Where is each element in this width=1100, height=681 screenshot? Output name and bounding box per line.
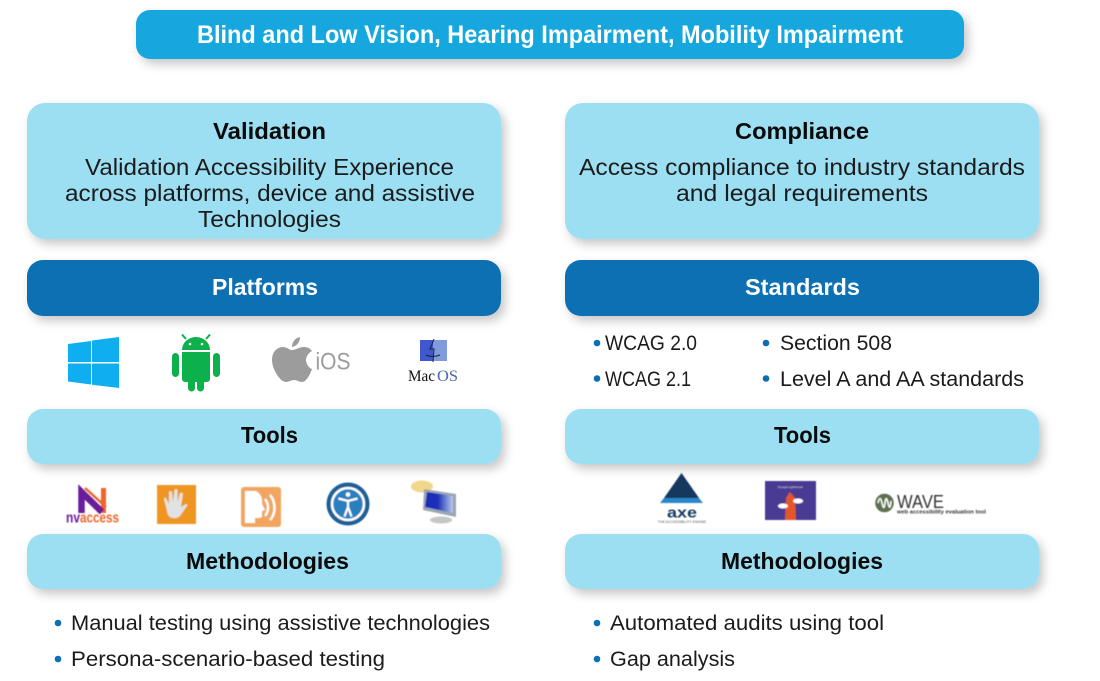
heading: tools left <box>27 409 501 464</box>
list: automated methodologies: Gap analysis <box>610 648 735 671</box>
icon: android <box>172 334 220 392</box>
heading: platforms <box>27 260 501 316</box>
icon: windows <box>68 337 119 388</box>
heading: methodologies left <box>27 534 501 589</box>
panel: compliance <box>565 103 1039 239</box>
icon: nvaccess: access <box>80 510 119 526</box>
icon: axe <box>658 473 707 524</box>
title banner <box>136 10 964 59</box>
list: standards <box>594 332 1024 391</box>
icon: WAVE <box>875 492 986 516</box>
heading: standards <box>565 260 1039 316</box>
panel: validation <box>27 103 501 239</box>
panel: validation: Validation Accessibility Experience <box>85 154 454 180</box>
heading: tools right: Tools <box>774 422 831 448</box>
icon: lighthouse: Google Lighthouse <box>778 485 803 489</box>
panel: compliance: and legal requirements <box>676 180 928 206</box>
heading: tools left: Tools <box>241 422 298 448</box>
title banner: Blind and Low Vision, Hearing Impairment, Mobility Impairment <box>197 21 904 49</box>
heading: methodologies right: Methodologies <box>721 548 883 574</box>
heading: methodologies right <box>565 534 1039 589</box>
icon: lighthouse <box>765 481 816 520</box>
heading: tools right <box>565 409 1039 464</box>
list: automated methodologies <box>594 612 884 671</box>
list: automated methodologies: Automated audits using tool <box>610 612 884 635</box>
list: manual methodologies <box>55 612 490 671</box>
icon: apple iOS: iOS <box>316 348 350 376</box>
list: standards: WCAG 2.1 <box>605 368 691 391</box>
icon: hand <box>157 485 196 524</box>
icon: apple iOS <box>272 337 350 382</box>
icon: computer monitor <box>411 480 456 524</box>
icon: Mac OS: Mac <box>408 368 435 385</box>
heading: methodologies left: Methodologies <box>186 548 349 574</box>
icon: axe: axe <box>667 504 697 522</box>
heading: platforms: Platforms <box>212 274 318 300</box>
icon: Mac OS <box>408 339 458 385</box>
icon: speaking head <box>241 487 281 527</box>
list: standards: Section 508 <box>780 332 892 355</box>
list: standards: Level A and AA standards <box>780 368 1024 391</box>
icon: WAVE: web accessibility evaluation tool <box>896 510 986 516</box>
panel: compliance: Compliance <box>735 118 869 144</box>
panel: validation: across platforms, device and assistive <box>65 180 475 206</box>
icon: accessibility <box>326 482 370 526</box>
icon: nvaccess <box>66 488 119 526</box>
panel: compliance: Access compliance to industry standards <box>579 154 1025 180</box>
heading: standards: Standards <box>745 274 860 300</box>
icon: axe: THE ACCESSIBILITY ENGINE <box>658 520 707 524</box>
list: standards: WCAG 2.0 <box>605 332 697 355</box>
icon: nvaccess: nv <box>66 510 80 526</box>
panel: validation: Technologies <box>198 206 341 232</box>
panel: validation: Validation <box>213 118 326 144</box>
icon: WAVE: WAVE <box>897 492 944 512</box>
icon: Mac OS: OS <box>437 368 458 385</box>
list: manual methodologies: Manual testing using assistive technologies <box>71 612 490 635</box>
list: manual methodologies: Persona-scenario-based testing <box>71 648 385 671</box>
